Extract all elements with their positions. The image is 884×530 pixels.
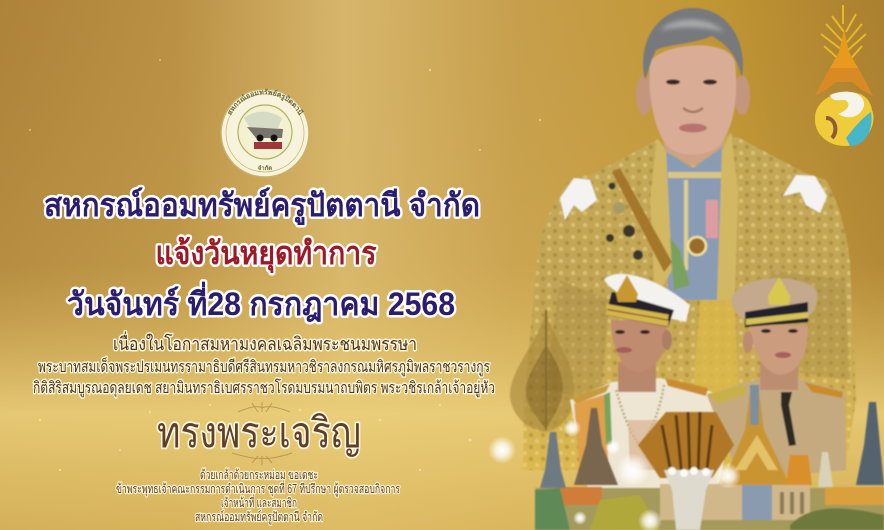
- grand palace temple: [535, 385, 884, 530]
- text block: signatories: สหกรณ์ออมทรัพย์ครูปัตตานี จำกัด: [195, 510, 323, 525]
- royal emblem: golden crown and cipher: [815, 5, 874, 146]
- cap: [731, 278, 817, 322]
- neck: [618, 362, 656, 392]
- cap: [604, 274, 690, 322]
- hair: [643, 8, 743, 80]
- inner blue garment: [664, 146, 724, 300]
- eyes: [666, 79, 680, 85]
- face: [750, 325, 808, 375]
- ears: [636, 75, 652, 115]
- sash: [612, 168, 672, 272]
- neck: [760, 360, 798, 390]
- uniform: [570, 378, 728, 500]
- face: [611, 320, 667, 372]
- cooperative logo: สหกรณ์ออมทรัพย์ครูปัตตานี: [228, 88, 304, 116]
- white epaulettes: [560, 178, 597, 220]
- medals: [606, 182, 643, 260]
- text block: signatories: ข้าพระพุทธเจ้าคณะกรรมการดำเนินการ ชุดที่ 67 ที่ปรึกษา ผู้ตรวจสอบกิจการ: [116, 480, 400, 497]
- cooperative logo: [220, 88, 309, 178]
- cooperative logo: จำกัด: [258, 164, 272, 172]
- heading: holiday notice: แจ้งวันหยุดทำการ: [156, 235, 376, 274]
- robe: [523, 133, 856, 470]
- text block: royal title line three: กิติสิริสมบูรณอดุลยเดช สยามินทราธิเบศรราชวโรดมบรมนาถบพิตร พระวชิรเกล้าเจ้าอยู่หัว: [33, 378, 495, 398]
- text block: signatories: เจ้าหน้าที่ และสมาชิก: [221, 494, 297, 510]
- royal portrait: king in golden robe: [523, 8, 856, 470]
- text block: signatories: [116, 468, 400, 525]
- tie: [781, 392, 796, 446]
- blessing: long live the king: ทรงพระเจริญ: [157, 409, 361, 457]
- lower robe panels: [690, 300, 740, 440]
- face: [650, 45, 736, 155]
- ceremonial golden ornament: [510, 310, 574, 432]
- flower fan offering: [638, 412, 734, 530]
- prince portrait: white naval uniform: [570, 274, 728, 500]
- sparkling lights: [488, 419, 741, 530]
- text block: signatories: ด้วยเกล้าด้วยกระหม่อม ขอเดชะ: [200, 468, 318, 482]
- text block: royal title line two: พระบาทสมเด็จพระปรเมนทรรามาธิบดีศรีสินทรมหาวชิราลงกรณมหิศรภูมิพลราชวรางกูร: [38, 356, 490, 377]
- heading: holiday date: วันจันทร์ ที่28 กรกฎาคม 2568: [67, 281, 455, 322]
- text block: occasion line one: เนื่องในโอกาสมหามงคลเฉลิมพระชนมพรรษา: [113, 331, 417, 354]
- collar bands: [650, 138, 672, 300]
- neck: [664, 130, 724, 166]
- prince portrait: khaki uniform: [707, 277, 846, 480]
- decorative flourish above blessing: [238, 402, 290, 412]
- title: cooperative name: สหกรณ์ออมทรัพย์ครูปัตตานี จำกัด: [44, 187, 480, 226]
- mouth: [679, 124, 707, 132]
- decorative flourish below blessing: [232, 453, 292, 465]
